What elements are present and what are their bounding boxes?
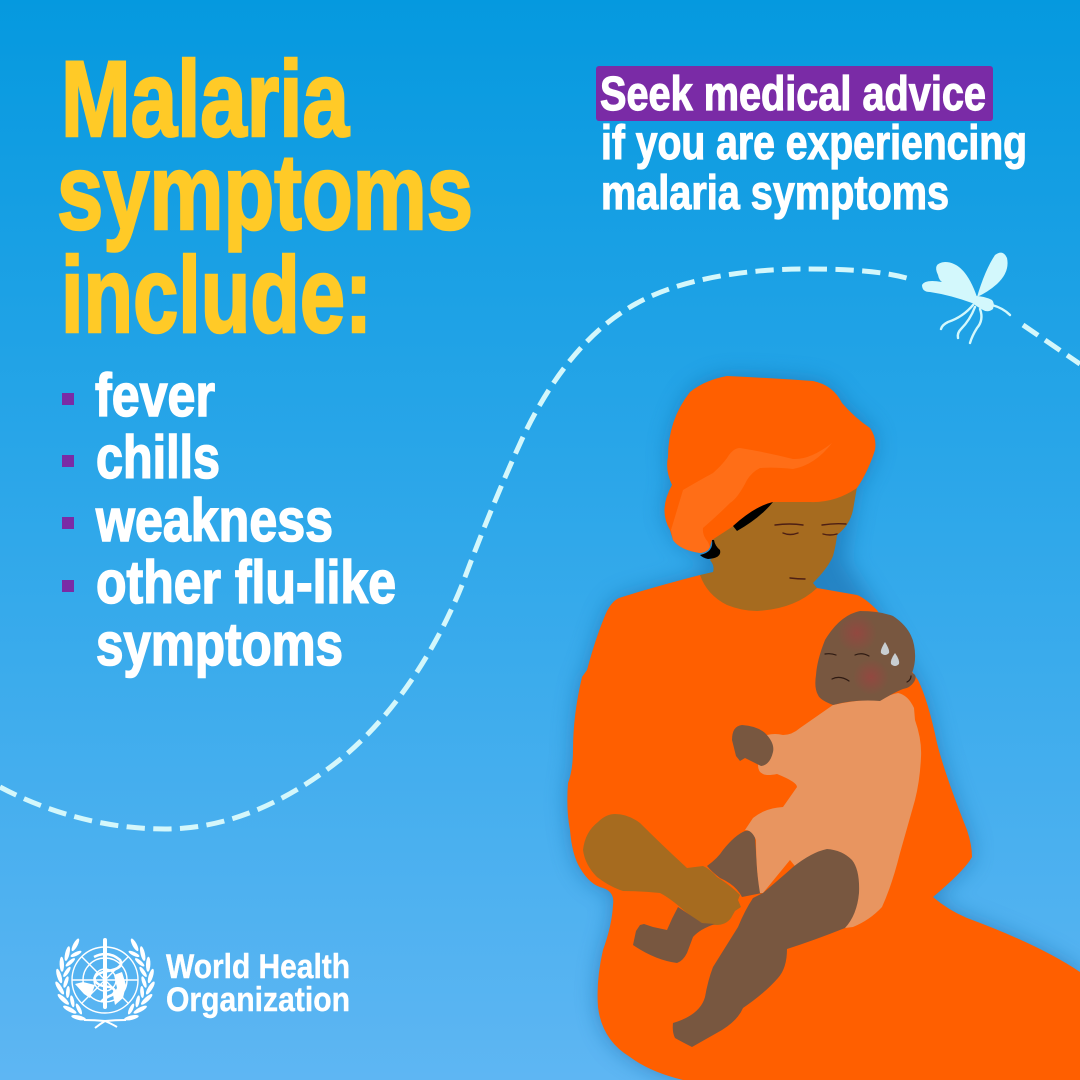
baby far leg — [707, 831, 762, 897]
highlight box — [596, 66, 993, 121]
icon: mosquito — [922, 253, 1010, 343]
mother hair — [733, 502, 773, 531]
baby cheek flush — [853, 659, 889, 695]
callout: seek medical advice — [596, 66, 1027, 220]
symptom: other flu-like symptoms: other flu-like — [96, 549, 396, 616]
title: include: — [61, 234, 372, 355]
baby head — [815, 611, 916, 705]
mother ear bun — [700, 540, 720, 559]
organization name: Organization — [166, 981, 350, 1019]
mother dress — [567, 575, 1080, 1080]
dashed flight path — [0, 269, 1080, 829]
symptom: other flu-like symptoms — [96, 549, 396, 678]
emblem — [54, 938, 156, 1028]
illustration: mother holding sick baby — [567, 376, 1080, 1080]
globe — [72, 947, 138, 1013]
bullet: other flu-like symptoms — [62, 580, 74, 592]
callout text — [601, 117, 1027, 220]
symptom: weakness: weakness — [95, 487, 333, 554]
continents — [75, 972, 126, 1005]
sweat drop — [881, 642, 889, 655]
callout text: malaria symptoms — [601, 167, 949, 220]
baby facial features — [825, 654, 911, 682]
baby onesie — [745, 693, 921, 928]
title — [57, 38, 473, 355]
symptom: fever: fever — [95, 362, 215, 429]
baby hand — [732, 725, 773, 766]
symptom: chills: chills — [96, 424, 220, 491]
title: Malaria — [61, 38, 350, 159]
baby near leg — [673, 849, 859, 1047]
symptoms list — [62, 362, 396, 678]
bullet: fever — [62, 393, 74, 405]
title: symptoms — [57, 131, 473, 252]
organization name — [166, 948, 350, 1019]
mother turban — [664, 376, 875, 553]
baby lower far leg — [633, 907, 715, 963]
organization name: World Health — [166, 948, 350, 986]
logo: World Health Organization — [54, 938, 350, 1028]
callout headline: Seek medical advice — [600, 68, 986, 121]
mother facial features — [775, 524, 846, 579]
baby fever flush — [837, 613, 877, 653]
mother face and neck — [700, 470, 857, 611]
sweat drop — [891, 653, 899, 666]
figure shadow — [567, 376, 1080, 1080]
mother arm — [583, 814, 741, 925]
symptom: other flu-like symptoms: symptoms — [96, 611, 343, 678]
laurel wreath — [54, 938, 156, 1028]
bullet: chills — [62, 455, 74, 467]
staff and serpent — [94, 938, 121, 1009]
turban highlight — [671, 443, 832, 553]
bullet: weakness — [62, 517, 74, 529]
